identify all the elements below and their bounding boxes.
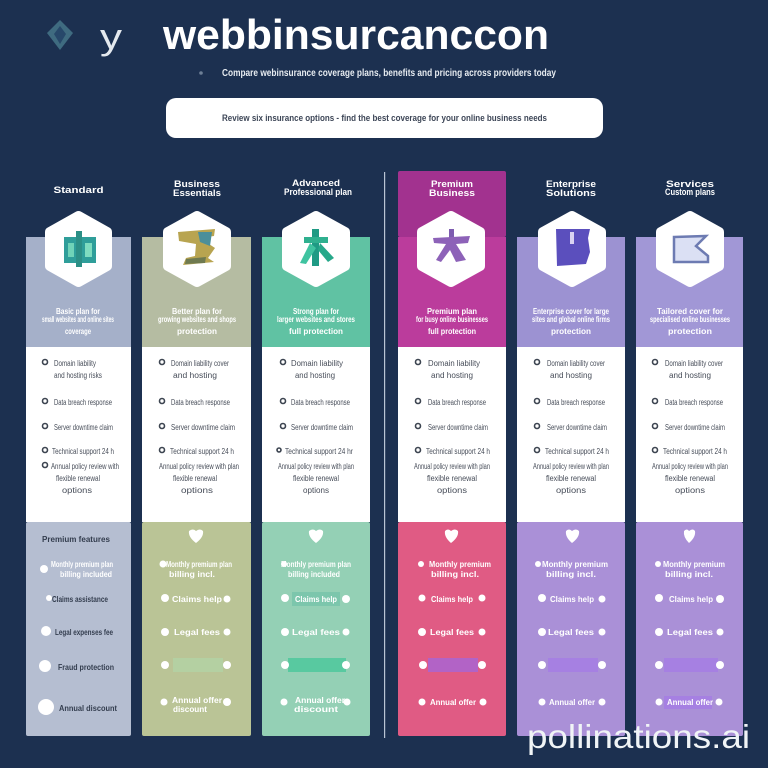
icon: column 3 <box>300 229 334 266</box>
column 2 description <box>158 307 236 336</box>
banner <box>166 98 603 138</box>
column 4 lower block <box>398 522 506 736</box>
column 1 lower list <box>38 535 117 715</box>
column 1 description <box>42 307 114 336</box>
column 4 heading <box>429 179 475 198</box>
column 4 lower list: Legal fees <box>430 628 475 637</box>
column 1 feature list: Server downtime claim <box>54 423 113 432</box>
column 3 heading <box>284 178 352 197</box>
column 3 lower list: Claims help <box>295 595 337 604</box>
column 4 lower list <box>418 560 491 707</box>
column 1 lower list: Fraud protection <box>58 663 114 672</box>
column 1 lower list: Premium features <box>42 535 111 544</box>
panel: column 3 <box>262 178 370 736</box>
column 4 lower list: billing incl. <box>431 570 479 579</box>
column 5 lower list: Annual offer <box>549 698 595 707</box>
column 4 feature list: options <box>437 486 467 495</box>
column 2 lower list: Monthly premium plan <box>166 560 232 569</box>
column 6 feature list: Server downtime claim <box>665 423 725 432</box>
column 6 description <box>650 307 730 336</box>
column 6 description: Tailored cover for <box>657 307 723 316</box>
column 2 feature list: Annual policy review with plan <box>159 462 239 471</box>
column 2 feature list: Server downtime claim <box>171 423 235 432</box>
column 4 lower list: Monthly premium <box>429 560 491 569</box>
column 5 heading <box>546 179 596 198</box>
column 3 description: larger websites and stores <box>277 315 355 324</box>
column 2 lower list: Legal fees <box>174 628 221 637</box>
column 6 feature list: Annual policy review with plan <box>652 462 728 471</box>
column 2 heading <box>173 179 221 198</box>
column 2 description: protection <box>177 327 217 336</box>
column 1 list block <box>26 347 131 522</box>
column 1 hexagon <box>50 216 107 282</box>
column 2 list block <box>142 347 251 522</box>
column 3 lower list: Monthly premium plan <box>281 560 351 569</box>
column 6 feature list: and hosting <box>669 371 711 380</box>
panel: column 6 <box>636 179 743 736</box>
column 5 feature list: Data breach response <box>547 398 605 407</box>
column 2 feature list: options <box>181 486 213 495</box>
column 3 feature list: Server downtime claim <box>291 423 353 432</box>
column 5 feature list: Server downtime claim <box>547 423 607 432</box>
column 5 hexagon <box>543 216 601 282</box>
column 5 lower list: Monthly premium <box>542 560 608 569</box>
column 5 description: Enterprise cover for large <box>533 307 609 316</box>
column 2 lower list <box>160 560 232 714</box>
column 6 hexagon <box>661 216 719 282</box>
column 2 header block <box>142 237 251 347</box>
column 1 feature list: Domain liability <box>54 359 96 368</box>
column 2 feature list: and hosting <box>173 371 217 380</box>
column 4 feature list: Server downtime claim <box>428 423 488 432</box>
column 4 feature list: Data breach response <box>428 398 486 407</box>
column 2 hexagon <box>168 216 226 282</box>
icon: column 6 <box>674 236 708 262</box>
column 6 heart icon <box>684 530 695 543</box>
column 5 heading: Enterprise <box>546 179 596 189</box>
column 6 lower list: Annual offer <box>667 698 713 707</box>
column 3 feature list: Data breach response <box>291 398 350 407</box>
column 5 feature list: Annual policy review with plan <box>533 462 609 471</box>
column 1 feature list <box>42 359 119 495</box>
column 5 list block <box>517 347 625 522</box>
column 4 list block <box>398 347 506 522</box>
column 1 description: small websites and online sites <box>42 315 114 324</box>
column 1 header block <box>26 237 131 347</box>
column 3 header block <box>262 237 370 347</box>
column 3 lower list: billing included <box>288 570 340 579</box>
column 1 feature list: Technical support 24 h <box>52 447 114 456</box>
column 4 feature list: flexible renewal <box>427 474 477 483</box>
column 4 tall header <box>398 171 506 237</box>
column 6 lower list: billing incl. <box>665 570 713 579</box>
column 5 lower list: Legal fees <box>548 628 595 637</box>
column 3 feature list: options <box>303 486 329 495</box>
column 3 description <box>277 307 355 336</box>
column 4 heading: Business <box>429 188 475 198</box>
column 2 feature list: Data breach response <box>171 398 230 407</box>
column 4 description <box>416 307 488 336</box>
column 4 feature list: and hosting <box>431 371 473 380</box>
column 4 heart icon <box>445 530 458 543</box>
column 5 feature list: Technical support 24 h <box>545 447 609 456</box>
column 6 lower list <box>655 560 725 709</box>
column 6 header block <box>636 237 743 347</box>
column 4 feature list <box>414 359 490 495</box>
column 5 description: protection <box>551 327 591 336</box>
column 3 feature list: and hosting <box>295 371 335 380</box>
subtitle: Compare webinsurance coverage plans, benefits and pricing across providers today <box>222 68 556 79</box>
column 5 lower list: billing incl. <box>546 570 596 579</box>
column 1 feature list: Data breach response <box>54 398 112 407</box>
column 3 lower list: Annual offer <box>295 696 345 705</box>
column 6 heading <box>665 179 715 197</box>
column 2 lower list: billing incl. <box>169 570 215 579</box>
column 3 lower list <box>280 560 351 714</box>
watermark: pollinations.ai <box>527 718 750 755</box>
banner: Review six insurance options - find the best coverage for your online business needs <box>222 113 547 123</box>
column 6 feature list: options <box>675 486 705 495</box>
column 3 feature list: Technical support 24 hr <box>285 447 353 456</box>
column 2 lower list: discount <box>173 705 207 714</box>
column 4 feature list: Domain liability <box>428 359 480 368</box>
column 4 hexagon <box>422 216 480 282</box>
column 5 feature list: and hosting <box>550 371 592 380</box>
panel: column 5 <box>517 179 625 736</box>
column 5 feature list: Domain liability cover <box>547 359 605 368</box>
column 1 lower list: Annual discount <box>59 704 117 713</box>
column 4 description: full protection <box>428 327 476 336</box>
column 2 heading: Essentials <box>173 188 221 198</box>
column 1 feature list: Annual policy review with <box>51 462 119 471</box>
column 2 feature list: Technical support 24 h <box>170 447 234 456</box>
column 3 lower list: discount <box>294 705 338 714</box>
column 2 lower list: Annual offer <box>172 696 222 705</box>
column 5 heart icon <box>566 530 579 543</box>
column 5 description: sites and global online firms <box>532 315 610 324</box>
column 6 list block <box>636 347 743 522</box>
column 5 heading: Solutions <box>546 188 596 198</box>
column 3 list block <box>262 347 370 522</box>
column 3 heart icon <box>309 530 323 543</box>
column 2 heart icon <box>189 530 203 543</box>
icon: column 1 <box>64 231 96 267</box>
column 6 feature list: flexible renewal <box>665 474 715 483</box>
column 4 lower list: Annual offer <box>430 698 476 707</box>
column 6 feature list <box>652 359 728 495</box>
column 2 feature list: Domain liability cover <box>171 359 229 368</box>
title: webbinsurcanccon <box>162 11 549 58</box>
column 5 feature list <box>533 359 609 495</box>
column 5 lower block <box>517 522 625 736</box>
icon: column 2 <box>178 229 215 265</box>
divider <box>384 172 385 738</box>
column 4 description: for busy online businesses <box>416 315 488 324</box>
column 3 feature list: flexible renewal <box>293 474 339 483</box>
column 5 header block <box>517 237 625 347</box>
column 6 heading: Custom plans <box>665 187 715 197</box>
column 2 description: growing websites and shops <box>158 315 236 324</box>
column 6 description: specialised online businesses <box>650 315 730 324</box>
column 4 lower list: Claims help <box>431 595 473 604</box>
column 3 heading: Advanced <box>292 178 340 188</box>
column 6 feature list: Technical support 24 h <box>663 447 727 456</box>
column 1 feature list: flexible renewal <box>56 474 100 483</box>
column 1 lower list: Monthly premium plan <box>51 560 113 569</box>
logo letter: y <box>100 16 122 57</box>
column 3 description: Strong plan for <box>293 307 339 316</box>
column 3 heading: Professional plan <box>284 187 352 197</box>
column 5 description <box>532 307 610 336</box>
column 6 description: protection <box>668 327 712 336</box>
column 4 heading: Premium <box>431 179 473 189</box>
column 1 description: coverage <box>65 327 91 336</box>
column 1 feature list: and hosting risks <box>54 371 102 380</box>
column 3 lower list: Legal fees <box>292 628 341 637</box>
column 4 header block <box>398 237 506 347</box>
column 5 lower list: Claims help <box>550 595 594 604</box>
column 1 lower list: Claims assistance <box>52 595 108 604</box>
column 4 description: Premium plan <box>427 307 477 316</box>
panel: column 2 <box>142 179 251 736</box>
column 3 feature list: Annual policy review with plan <box>278 462 354 471</box>
column 2 heading: Business <box>174 179 220 189</box>
column 6 lower list: Legal fees <box>667 628 714 637</box>
column 4 feature list: Technical support 24 h <box>426 447 490 456</box>
icon: logo mark <box>47 20 73 50</box>
column 2 feature list: flexible renewal <box>173 474 217 483</box>
column 5 feature list: flexible renewal <box>546 474 596 483</box>
panel: column 4 <box>398 171 506 736</box>
column 5 feature list: options <box>556 486 586 495</box>
column 2 lower list: Claims help <box>172 595 222 604</box>
column 6 feature list: Data breach response <box>665 398 723 407</box>
panel: column 1 <box>26 185 131 736</box>
column 1 heading: Standard <box>54 185 104 195</box>
column 3 hexagon <box>287 216 345 282</box>
column 6 lower block <box>636 522 743 736</box>
column 1 feature list: options <box>62 486 92 495</box>
column 1 lower list: billing included <box>60 570 112 579</box>
column 3 lower block <box>262 522 370 736</box>
column 6 feature list: Domain liability cover <box>665 359 723 368</box>
column 1 description: Basic plan for <box>56 307 100 316</box>
column 2 description: Better plan for <box>172 307 222 316</box>
column 6 lower list: Claims help <box>669 595 713 604</box>
column 1 lower block <box>26 522 131 736</box>
column 6 heading: Services <box>666 179 714 189</box>
column 2 feature list <box>159 359 239 495</box>
icon: column 5 <box>556 229 590 266</box>
column 6 lower list: Monthly premium <box>663 560 725 569</box>
column 3 description: full protection <box>289 327 343 336</box>
column 5 lower list <box>535 560 608 707</box>
column 3 feature list <box>277 359 354 495</box>
column 1 lower list: Legal expenses fee <box>55 628 113 637</box>
column 2 lower block <box>142 522 251 736</box>
icon: column 4 <box>433 229 470 262</box>
column 4 feature list: Annual policy review with plan <box>414 462 490 471</box>
column 3 feature list: Domain liability <box>291 359 343 368</box>
